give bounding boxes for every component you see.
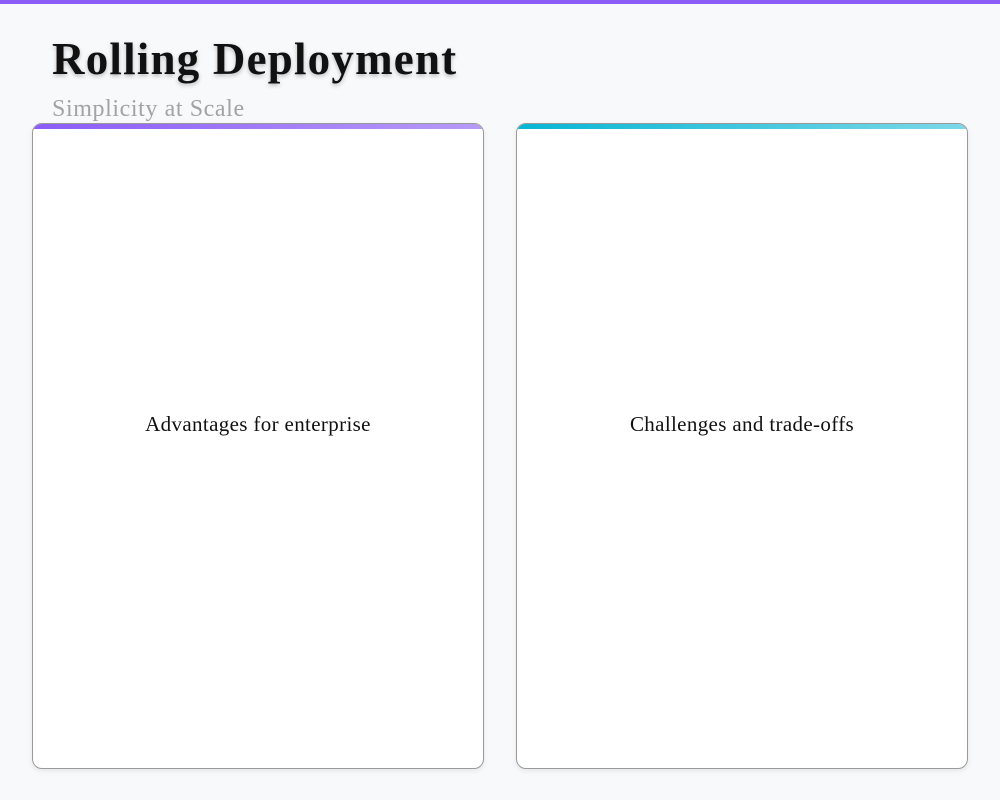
title: Rolling Deployment — [52, 34, 457, 84]
panel label: advantages: Advantages for enterprise — [145, 412, 371, 436]
subtitle: Simplicity at Scale — [52, 96, 245, 122]
panel: advantages — [32, 123, 484, 769]
panel: challenges — [516, 123, 968, 769]
panel label: challenges: Challenges and trade-offs — [630, 412, 854, 436]
